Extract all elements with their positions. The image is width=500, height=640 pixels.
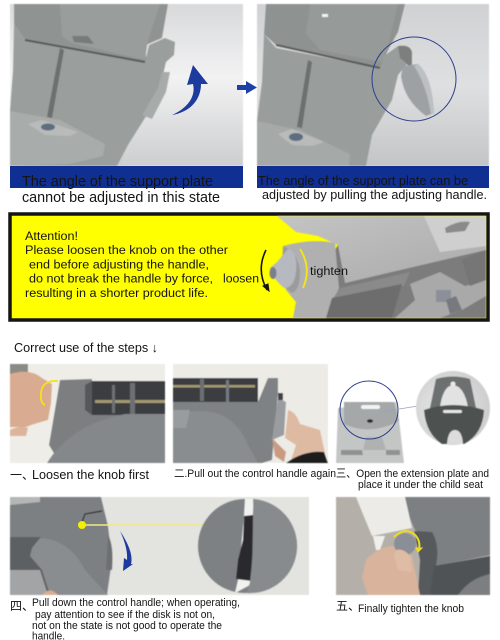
blue caption bar — [10, 166, 243, 188]
icon: yellow rotate arrow — [394, 531, 422, 552]
arrow: blue curved up — [172, 65, 208, 115]
step 5 — [336, 497, 490, 615]
attention text: do not break the handle by force, — [29, 272, 213, 286]
caption: step 3: place it under the child seat — [358, 479, 484, 491]
attention text: Please loosen the knob on the other — [25, 243, 228, 257]
caption: step 4: Pull down the control handle; when operating, — [32, 597, 240, 609]
step 2 — [173, 364, 336, 480]
caption: can adjust — [258, 174, 487, 202]
caption: cannot adjust: cannot be adjusted in this state — [22, 190, 220, 206]
caption: step 3 — [336, 468, 489, 491]
panel: attention — [10, 214, 488, 320]
label: loosen: loosen — [223, 272, 259, 286]
highlight circle — [372, 37, 456, 121]
photo: knob close-up — [270, 216, 486, 318]
attention text: end before adjusting the handle, — [29, 258, 209, 272]
caption: can adjust: adjusted by pulling the adjusting handle. — [262, 188, 487, 202]
panel: can be adjusted — [257, 4, 489, 202]
caption: step 2: 二.Pull out the control handle again — [174, 468, 336, 480]
photo: seat with handle pulled — [257, 4, 489, 166]
panel: cannot be adjusted — [10, 4, 243, 206]
arrow: loosen direction — [261, 250, 269, 291]
blue caption bar — [257, 166, 489, 188]
connector line — [380, 406, 418, 412]
heading: correct use of the steps: Correct use of the steps ↓ — [14, 340, 158, 355]
step 3 — [336, 371, 490, 491]
photo: seat with handle closed — [10, 4, 243, 166]
caption: step 1: 一、 — [10, 468, 34, 482]
label: tighten: tighten — [310, 264, 348, 278]
caption: cannot adjust: The angle of the support plate — [22, 174, 213, 190]
attention text — [25, 229, 228, 300]
caption: step 1: Loosen the knob first — [32, 467, 149, 482]
photo: pull handle — [173, 364, 328, 463]
photo: device with extension plate — [336, 402, 404, 463]
step 1 — [10, 364, 165, 482]
indicator line and dot — [78, 521, 204, 529]
caption: step 5: Finally tighten the knob — [358, 603, 464, 615]
caption: step 4 — [10, 597, 240, 640]
photo: pull down handle — [10, 497, 309, 595]
arrow: tighten direction — [300, 249, 307, 288]
black frame and yellow background — [10, 214, 488, 320]
photo: tighten knob — [336, 497, 490, 595]
highlight circle — [340, 381, 398, 439]
caption: cannot adjust — [22, 174, 220, 206]
inset: extension plate — [416, 371, 490, 445]
arrow: blue curved down — [120, 531, 133, 571]
caption: step 4: 四、 — [10, 599, 34, 613]
attention text: resulting in a shorter product life. — [25, 286, 208, 300]
caption: step 4: pay attention to see if the disk is not on, — [35, 609, 215, 621]
inset: teeth detail — [198, 499, 297, 593]
caption: step 5: 五、 — [336, 599, 360, 613]
icon: yellow rotate arrow — [41, 381, 58, 405]
step 4 — [10, 497, 309, 640]
caption: can adjust: The angle of the support plate can be — [258, 174, 468, 188]
arrow: blue right between panels — [237, 81, 257, 94]
attention text: Attention! — [25, 229, 78, 243]
caption: step 5 — [336, 599, 464, 615]
caption: step 4: not on the state is not good to operate the — [32, 620, 222, 632]
photo: loosen knob — [10, 364, 165, 463]
